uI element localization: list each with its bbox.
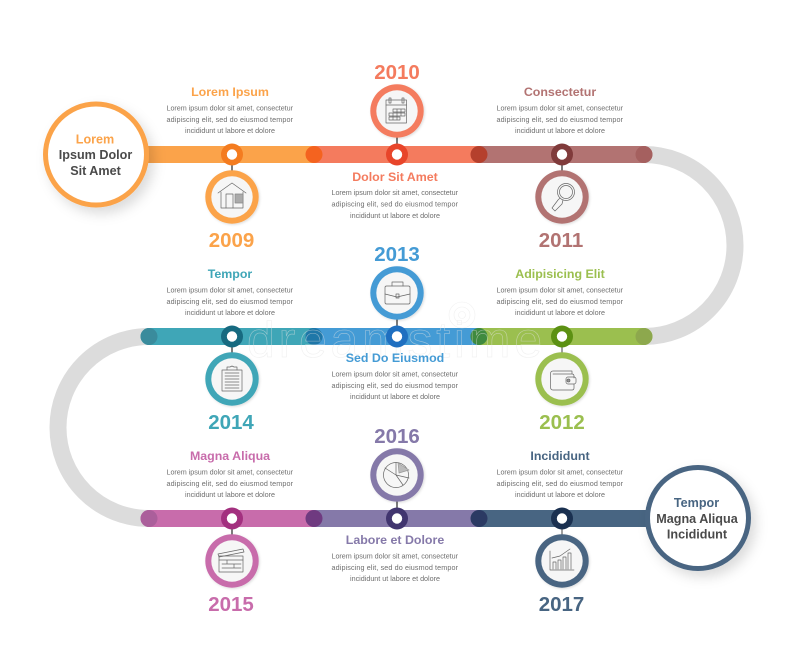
- icon: wallet: [550, 371, 576, 390]
- milestone 2009: Lorem ipsum dolor sit amet, consectetur: [166, 104, 294, 112]
- milestone 2011: Consectetur: [524, 85, 596, 99]
- end circle: Incididunt: [667, 528, 728, 542]
- milestone 2010: 2010: [374, 61, 420, 84]
- milestone 2017: 2017: [539, 593, 584, 616]
- watermark: dreamstime: [247, 312, 542, 368]
- milestone 2013: Lorem ipsum dolor sit amet, consectetur: [332, 370, 459, 378]
- timeline row 3 bars: [140, 510, 654, 527]
- milestone 2017: Lorem ipsum dolor sit amet, consectetur: [496, 468, 624, 476]
- milestone 2011: Lorem ipsum dolor sit amet, consectetur: [496, 104, 624, 112]
- milestone 2015: Lorem ipsum dolor sit amet, consectetur: [166, 468, 294, 476]
- milestone 2009: Lorem Ipsum: [191, 85, 269, 99]
- milestone 2009: adipiscing elit, sed do eiusmod tempor: [166, 115, 294, 124]
- icon: growth chart: [550, 549, 574, 570]
- milestone 2009: incididunt ut labore et dolore: [185, 126, 275, 135]
- timeline row 1 bars: [145, 146, 652, 163]
- milestone 2009: 2009: [209, 229, 254, 252]
- milestone 2015: Magna Aliqua: [190, 449, 270, 463]
- milestone 2015: [166, 449, 294, 616]
- start circle: [43, 102, 149, 208]
- end circle: Magna Aliqua: [656, 512, 739, 526]
- milestone 2016: [332, 425, 459, 583]
- milestone 2017: Incididunt: [530, 449, 590, 463]
- icon: pie chart: [384, 462, 409, 488]
- end circle: Tempor: [674, 496, 719, 510]
- milestone 2013: incididunt ut labore et dolore: [350, 392, 440, 401]
- milestone 2016: 2016: [374, 425, 420, 448]
- milestone 2011: adipiscing elit, sed do eiusmod tempor: [496, 115, 624, 124]
- icon: calendar: [386, 98, 406, 123]
- grey connector curve: right: [644, 154, 735, 336]
- milestone 2015: 2015: [208, 593, 254, 616]
- milestone 2016: Lorem ipsum dolor sit amet, consectetur: [332, 552, 459, 560]
- milestone 2017: incididunt ut labore et dolore: [515, 490, 605, 499]
- milestone 2014: Lorem ipsum dolor sit amet, consectetur: [166, 286, 294, 294]
- milestone 2012: adipiscing elit, sed do eiusmod tempor: [496, 297, 624, 306]
- milestone 2010: Lorem ipsum dolor sit amet, consectetur: [332, 188, 459, 197]
- milestone 2009: [166, 85, 294, 252]
- milestone 2014: adipiscing elit, sed do eiusmod tempor: [166, 297, 294, 306]
- timeline row 2 bars: [140, 328, 652, 345]
- icon: magnifier: [552, 184, 574, 211]
- milestone 2016: Labore et Dolore: [346, 533, 444, 547]
- milestone 2015: adipiscing elit, sed do eiusmod tempor: [166, 479, 294, 488]
- milestone 2014: 2014: [208, 411, 254, 434]
- icon: briefcase: [385, 282, 410, 304]
- milestone 2012: incididunt ut labore et dolore: [515, 308, 605, 317]
- milestone 2010: [332, 61, 459, 220]
- icon: clipboard: [222, 366, 242, 391]
- milestone 2010: adipiscing elit, sed do eiusmod tempor: [332, 200, 459, 208]
- milestone 2011: 2011: [539, 229, 583, 252]
- milestone 2016: incididunt ut labore et dolore: [350, 574, 440, 583]
- milestone 2011: [496, 85, 624, 252]
- start circle: Ipsum Dolor: [59, 148, 132, 162]
- milestone 2010: Dolor Sit Amet: [352, 170, 438, 184]
- start circle: Sit Amet: [70, 164, 122, 178]
- icon: house: [218, 183, 246, 208]
- milestone 2014: incididunt ut labore et dolore: [185, 308, 275, 317]
- milestone 2013: Sed Do Eiusmod: [346, 351, 444, 365]
- end circle: [645, 465, 751, 571]
- milestone 2012: 2012: [539, 411, 585, 434]
- grey connector curve: left: [58, 336, 149, 519]
- milestone 2014: Tempor: [208, 267, 252, 281]
- milestone 2014: [166, 267, 294, 434]
- milestone 2010: incididunt ut labore et dolore: [350, 211, 440, 220]
- milestone 2017: adipiscing elit, sed do eiusmod tempor: [496, 479, 624, 488]
- milestone 2012: Lorem ipsum dolor sit amet, consectetur: [496, 286, 624, 294]
- milestone 2012: Adipisicing Elit: [515, 267, 605, 281]
- milestone 2011: incididunt ut labore et dolore: [515, 126, 605, 135]
- milestone 2013: adipiscing elit, sed do eiusmod tempor: [332, 381, 459, 390]
- milestone 2015: incididunt ut labore et dolore: [185, 490, 275, 499]
- milestone 2013: 2013: [374, 243, 420, 266]
- icon: clapperboard: [218, 549, 244, 572]
- milestone 2012: [496, 267, 624, 434]
- milestone 2013: [332, 243, 459, 401]
- start circle: Lorem: [76, 132, 114, 146]
- milestone 2017: [496, 449, 624, 616]
- milestone 2016: adipiscing elit, sed do eiusmod tempor: [332, 563, 459, 572]
